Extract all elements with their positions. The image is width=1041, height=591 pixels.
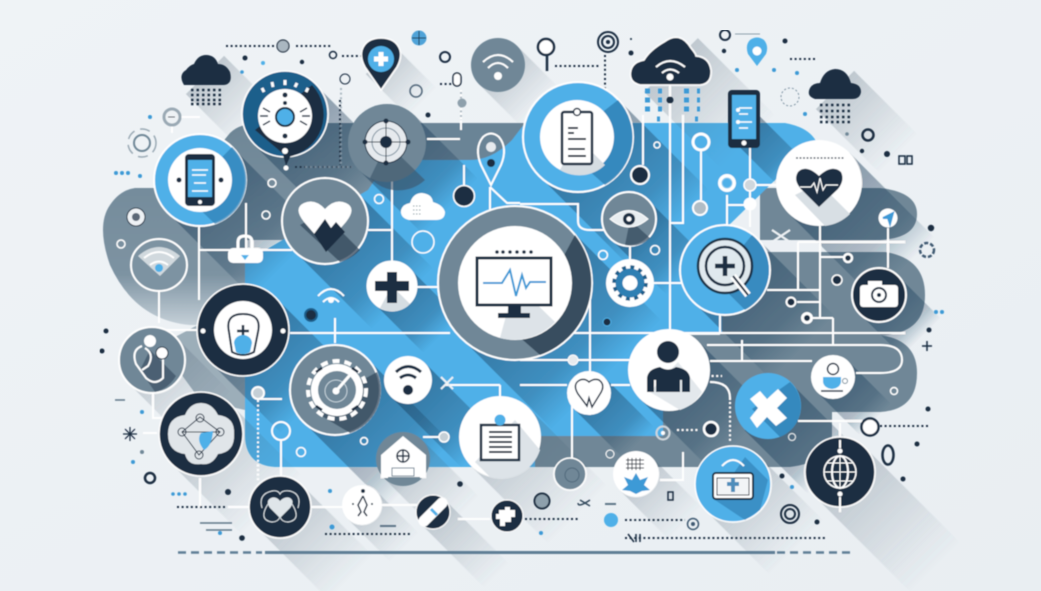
icon: blue map pin bbox=[747, 38, 767, 66]
icon: heart in navy circle bbox=[249, 476, 311, 538]
icon: sensor speech bubble bbox=[242, 71, 328, 170]
icon: cloud with wifi bbox=[630, 37, 711, 85]
icon: lock tag bbox=[228, 236, 263, 263]
panel: blue network backdrop bbox=[245, 123, 816, 467]
icon: network target on grey circle bbox=[348, 104, 426, 190]
panel: grey network backdrop bbox=[103, 123, 925, 467]
icon: rain drop dots bbox=[645, 91, 700, 119]
icon: smartphone top right bbox=[728, 90, 760, 148]
icon: magnifier outline bbox=[538, 39, 554, 71]
icon: heart on grey circle bbox=[282, 178, 368, 264]
icon: grey wifi circle bbox=[471, 38, 525, 92]
icon: tooth bbox=[567, 371, 611, 415]
icon: document bbox=[459, 396, 541, 478]
node rings and small circles bbox=[117, 30, 934, 530]
icon: heart with pulse bbox=[776, 140, 862, 226]
icon: pill bbox=[416, 495, 450, 529]
drop shadows bbox=[129, 38, 960, 591]
icon: arrow badge bbox=[878, 208, 898, 228]
icon: smartphone in blue circle bbox=[154, 134, 246, 226]
icon: grey oval bbox=[554, 458, 586, 490]
icon: cloud with dots, right bbox=[809, 69, 861, 122]
icon: star with grid bbox=[613, 451, 659, 497]
icon: wifi in outline circle bbox=[131, 239, 187, 291]
icon: navy circle with plus shield bbox=[197, 284, 289, 376]
scattered dots bbox=[100, 34, 944, 542]
icon: network in cloud bbox=[159, 392, 243, 476]
icon: navy node right bbox=[631, 166, 649, 184]
icon: white plus circle bbox=[367, 261, 417, 311]
icon: figure in white circle bbox=[342, 485, 382, 525]
bottom rule bbox=[178, 551, 850, 554]
icon: camera bbox=[852, 268, 906, 322]
icon: target with plus bbox=[680, 225, 770, 315]
connector lines bbox=[143, 46, 930, 538]
icon: puzzle bbox=[491, 500, 523, 532]
icon: map pointer outline bbox=[478, 134, 504, 185]
icon: map pin with plus bbox=[361, 38, 401, 90]
icon: coffee cup bbox=[811, 355, 855, 399]
icon: gear on grey circle bbox=[290, 345, 381, 435]
icon: gear bbox=[606, 259, 654, 307]
icon: blue padlock bbox=[695, 446, 771, 522]
icon: concentric target bbox=[598, 32, 618, 52]
icon: wifi white circle bbox=[384, 356, 432, 404]
icon: globe bbox=[805, 437, 875, 512]
icon: central monitor bbox=[438, 206, 592, 360]
icon: cloud with rain, top left bbox=[181, 55, 231, 104]
icon: stethoscope bbox=[119, 327, 185, 393]
icon: person bbox=[628, 329, 710, 411]
icon: blue X bbox=[735, 373, 801, 439]
icon: house bbox=[376, 432, 430, 486]
icon: navy node bbox=[454, 186, 474, 206]
icon: eye bbox=[602, 192, 656, 246]
icon: blue wifi on backdrop bbox=[305, 289, 344, 321]
icon: cloud small bbox=[401, 193, 445, 220]
icon: clipboard in blue circle bbox=[523, 82, 633, 192]
